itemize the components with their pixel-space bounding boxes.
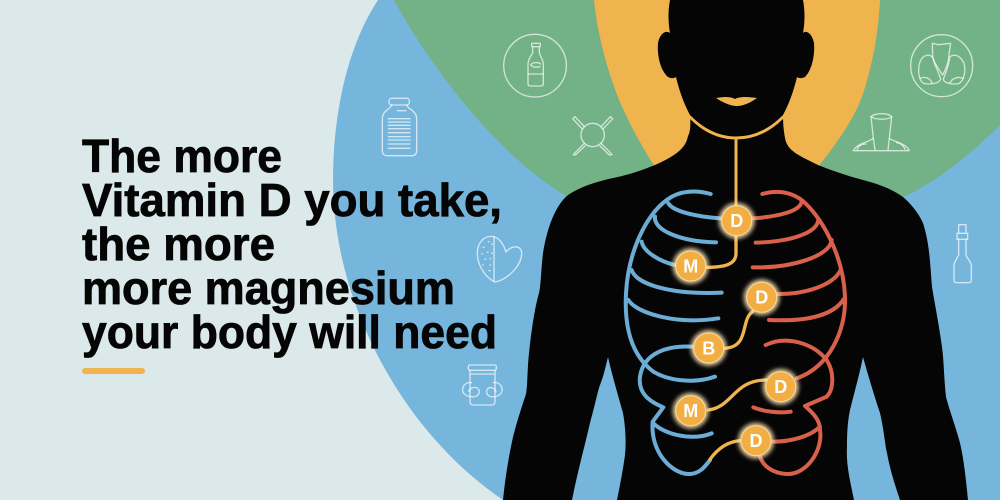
title text block: Vitamin D you take, (82, 174, 502, 226)
green arc background (394, 0, 1000, 197)
nutrient node B (691, 330, 727, 366)
nutrient node D bottom: D (750, 431, 762, 451)
nutrient node M upper: M (683, 256, 698, 276)
nutrient node D middle: D (755, 288, 768, 308)
icon: molecule cross (573, 117, 613, 155)
black body silhouette (503, 0, 968, 500)
nutrient node M upper (673, 248, 709, 284)
red ribcage right side (753, 192, 845, 474)
nutrient node D bottom (738, 423, 774, 459)
title text block: your body will need (82, 306, 497, 358)
icon: supplement jar (382, 98, 417, 156)
icon: bottle in circle (504, 34, 566, 97)
blue ribcage left side (626, 192, 722, 474)
lips (716, 97, 757, 106)
orange jaw line and neck line (690, 117, 783, 205)
nutrient node D lower right (763, 369, 799, 405)
blue circle background (333, 0, 1000, 500)
title text block: more magnesium (82, 262, 455, 314)
icon: cup with hands (463, 365, 502, 405)
nutrient node M lower: M (683, 401, 698, 421)
nutrient node M lower (673, 393, 709, 429)
icon: bust figure (853, 114, 909, 151)
orange halo behind head (594, 0, 880, 167)
nutrient node D lower right: D (774, 377, 787, 397)
nutrient node B: B (702, 338, 715, 358)
icon: small bottle (954, 225, 971, 283)
orange accent underline (82, 368, 145, 374)
icon: lungs in circle (911, 35, 973, 97)
icon: heart with dots (477, 236, 522, 282)
orange connector lines (707, 237, 767, 459)
nutrient node D middle (744, 279, 780, 315)
title text block: The more (82, 130, 282, 182)
nutrient node D top: D (730, 211, 743, 231)
title text block: the more (82, 218, 275, 270)
title text block (82, 130, 502, 358)
nutrient node D top (719, 203, 755, 239)
